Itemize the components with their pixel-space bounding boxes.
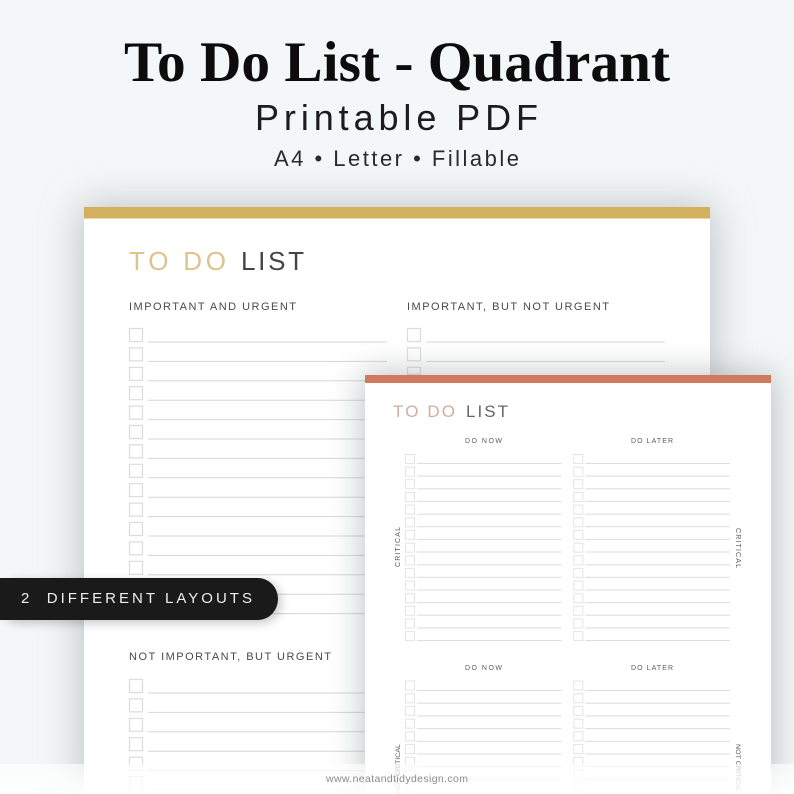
sheet heading: TO DO: [393, 402, 455, 421]
checklist: critical do now: [406, 454, 562, 641]
column label: do later lower: DO LATER: [631, 665, 673, 672]
checklist: not important but urgent: [130, 680, 387, 790]
quadrant label: important but not urgent: IMPORTANT, BUT NOT URGENT: [407, 301, 609, 313]
side label: critical left: CRITICAL: [395, 527, 402, 567]
side label: not critical right: NOT CRITICAL: [734, 744, 741, 793]
badge pill: [0, 578, 278, 620]
sheet paper: [84, 207, 710, 794]
sheet heading: LIST: [241, 246, 304, 276]
panel: small letter sheet: [361, 372, 775, 794]
checklist: important but not urgent: [408, 328, 665, 374]
footer fade band: [0, 764, 794, 794]
gold header bar: [84, 207, 710, 218]
sheet heading: LIST: [466, 402, 508, 421]
sheet shadow: [80, 205, 714, 794]
formats line: A4 • Letter • Fillable: [274, 146, 519, 171]
sheet heading: TO DO: [129, 246, 226, 276]
column label: do now lower: DO NOW: [465, 665, 502, 672]
website url: www.neatandtidydesign.com: [325, 773, 468, 785]
checklist: important and urgent: [130, 328, 387, 614]
sheet paper: [365, 375, 771, 794]
terracotta header bar: [365, 375, 771, 383]
checklist: not critical do now: [406, 681, 562, 792]
badge: 2 different layouts: [0, 578, 281, 623]
panel: large A4 sheet: [80, 205, 714, 794]
sheet heading: [129, 246, 304, 276]
subtitle: Printable PDF: [255, 97, 538, 138]
badge text: 2 DIFFERENT LAYOUTS: [21, 590, 252, 607]
column label: do later: DO LATER: [631, 438, 673, 445]
quadrant label: important and urgent: IMPORTANT AND URGENT: [129, 301, 296, 313]
checklist: critical do later: [574, 454, 730, 641]
badge shadow: [0, 581, 281, 623]
side label: not critical left: NOT CRITICAL: [395, 744, 402, 793]
column label: do now: DO NOW: [465, 438, 502, 445]
title: To Do List - Quadrant: [124, 31, 670, 94]
quadrant label: not important but urgent: NOT IMPORTANT, BUT URGENT: [129, 651, 331, 663]
side label: critical right: CRITICAL: [734, 528, 741, 568]
sheet shadow: [361, 372, 775, 794]
checklist: not critical do later: [574, 681, 730, 792]
sheet heading: [393, 402, 508, 421]
